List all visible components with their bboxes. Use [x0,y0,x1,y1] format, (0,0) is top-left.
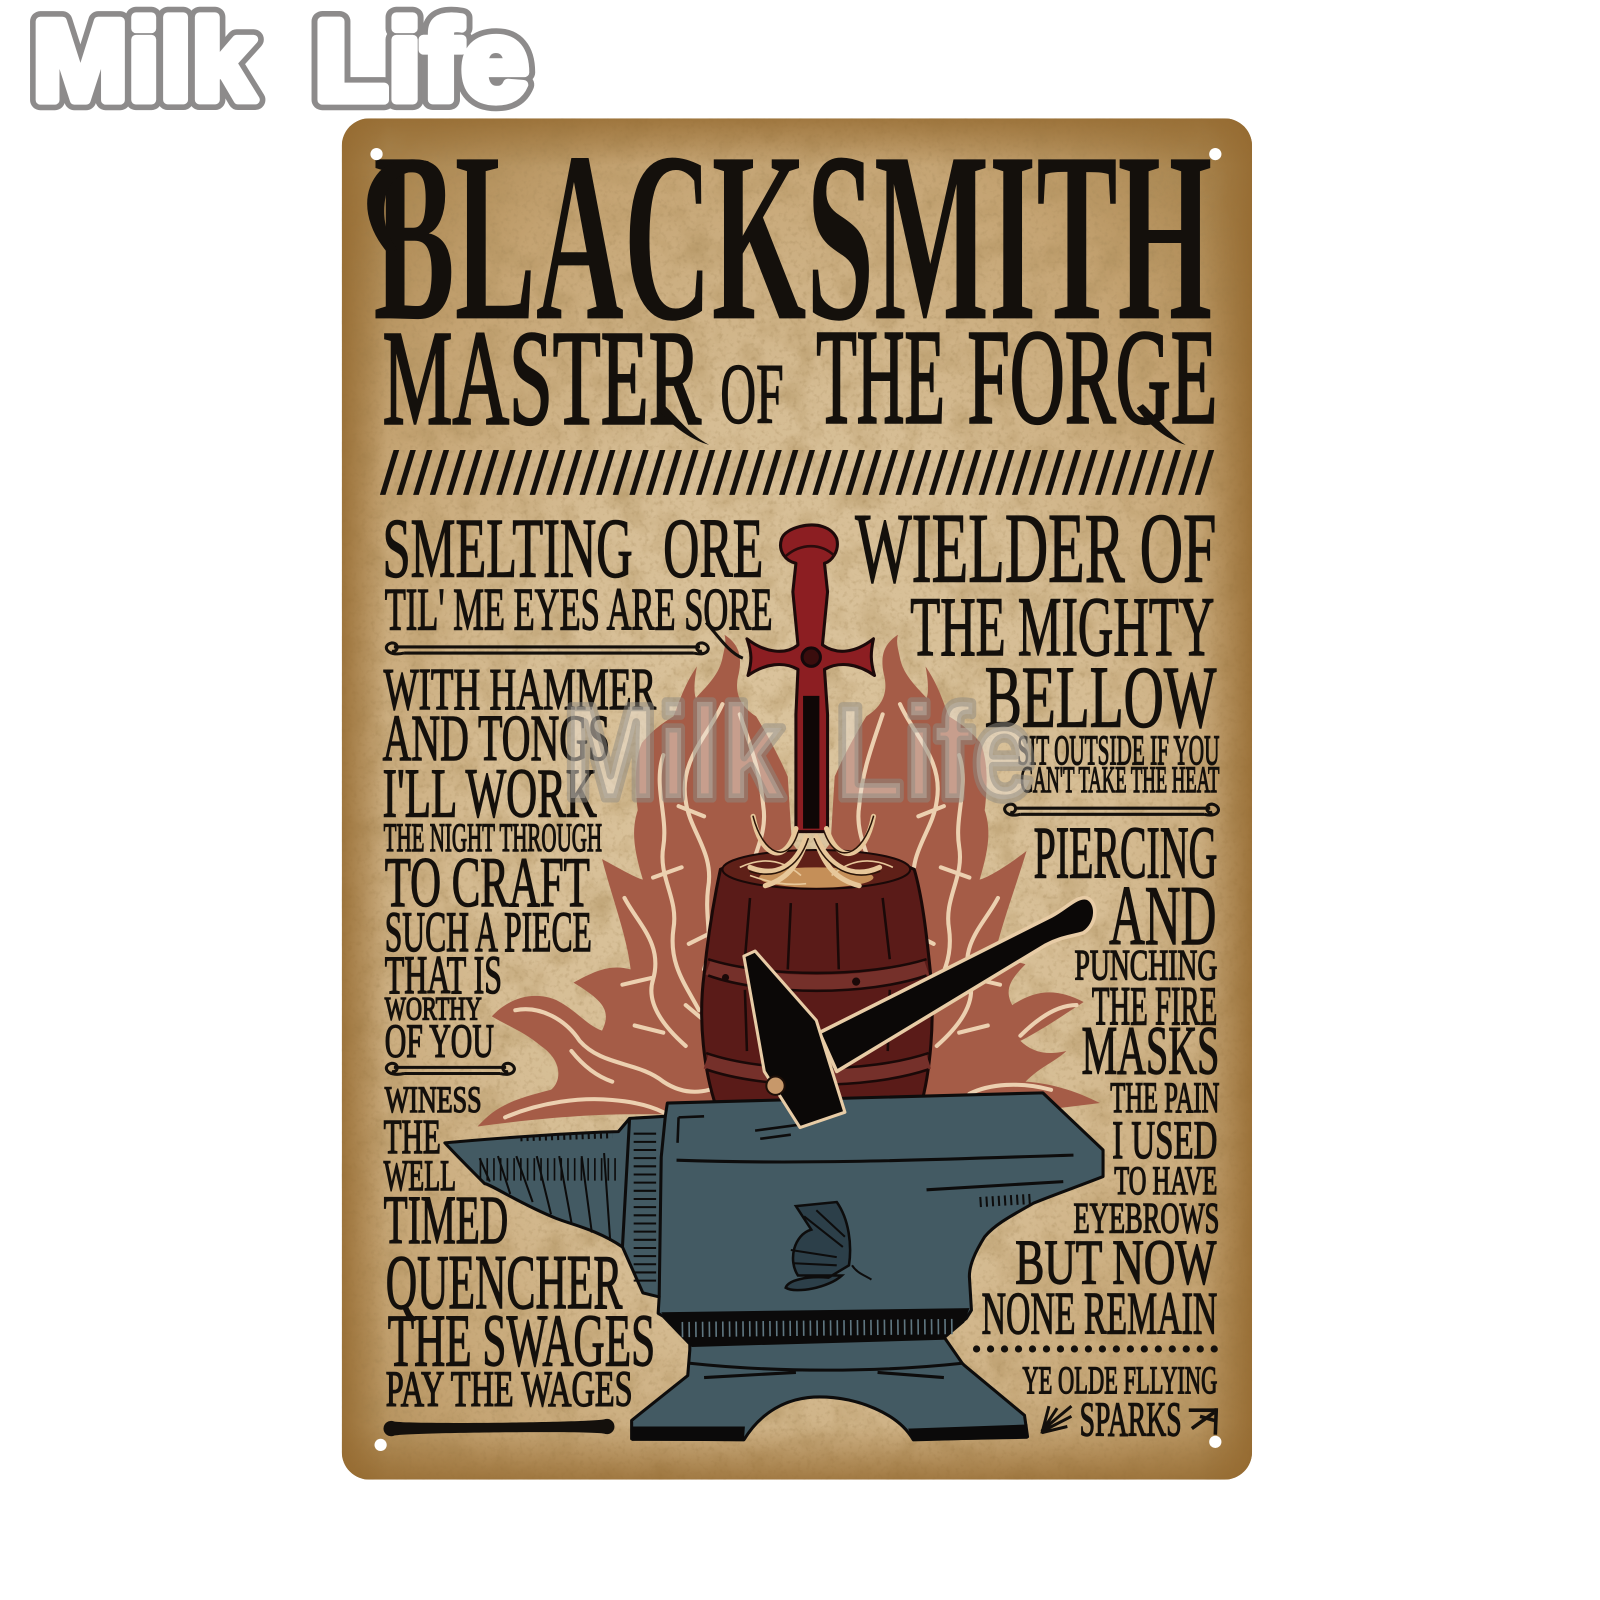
block: piercing and punching: TO HAVE [1114,1159,1217,1203]
illustration: sword in barrel [747,525,880,886]
mounting holes [370,148,1221,1451]
logo: Milk Life: Milk [33,0,256,125]
sword base splash [750,816,880,886]
logo: Milk Life [33,0,529,125]
block: witness the quencher: PAY THE WAGES [386,1362,633,1418]
block: witness the quencher: WELL [384,1153,456,1200]
block: with hammer: WITH HAMMER [384,656,656,722]
block: piercing and punching: AND [1109,870,1216,963]
block: with hammer: THAT IS [385,945,502,1005]
block: wielder of the mighty bellow: CAN'T TAKE THE HEAT [1020,759,1219,800]
block: wielder of the mighty bellow: WIELDER OF [855,493,1216,604]
block: piercing and punching: EYEBROWS [1073,1196,1219,1243]
illustration: anvil [445,1093,1103,1441]
block: with hammer: THE NIGHT THROUGH [384,816,602,860]
icon: spark arrow right [1189,1408,1216,1435]
illustration: flames [478,635,1100,1127]
block: with hammer: AND TONGS [383,703,610,775]
block: smelting ore: TIL' ME EYES ARE SORE [385,577,772,644]
illustration: barrel [702,850,932,1107]
block: wielder of the mighty bellow [855,493,1219,800]
watermark: Milk Life: Milk [563,679,784,827]
block: piercing and punching: PIERCING [1034,813,1217,895]
subtitle: MASTER OF THE FORGE: THE [816,302,945,452]
flame left [478,635,811,1127]
anvil hatching [480,1116,1031,1288]
logo: Milk Life: Life [314,0,529,125]
block: piercing and punching: MASKS [1082,1012,1219,1088]
block: wielder of the mighty bellow: BELLOW [985,649,1216,746]
block: witness the quencher: THE SWAGES [388,1300,655,1382]
subtitle: MASTER OF THE FORGE [383,302,1217,453]
block: with hammer: OF YOU [385,1015,494,1068]
parchment background [342,118,1252,1480]
block: piercing and punching: THE PAIN [1110,1075,1219,1122]
flame right [811,635,1100,1114]
block: witness the quencher [384,1079,655,1418]
logo: Milk Life: Life [314,0,529,125]
subtitle: MASTER OF THE FORGE: MASTER [383,303,701,453]
subtitle: MASTER OF THE FORGE: OF [720,346,784,441]
divider: slash band [387,450,1215,494]
block: wielder of the mighty bellow: THE MIGHTY [910,581,1214,674]
watermark: Milk Life: Life [835,679,1035,827]
right column text [855,493,1219,1447]
block: with hammer: TO CRAFT [385,843,590,922]
block: ye olde sparks [1022,1359,1217,1447]
watermark: Milk Life [563,679,1035,827]
block: piercing and punching: I USED [1112,1110,1217,1170]
ornament divider [386,1063,514,1074]
left column text [383,503,772,1436]
ornament divider [1005,804,1218,815]
block: with hammer [383,656,656,1068]
panel: metal sign [342,102,1252,1480]
block: piercing and punching: NONE REMAIN [982,1281,1217,1348]
anvil mark [786,1202,850,1290]
icon: spark arrow left [1042,1406,1071,1434]
block: piercing and punching: THE FIRE [1092,975,1217,1036]
block: ye olde sparks: SPARKS [1080,1392,1182,1447]
block: witness the quencher: QUENCHER [386,1239,623,1325]
block: with hammer: I'LL WORK [383,755,597,832]
block: with hammer: WORTHY [385,991,482,1027]
block: piercing and punching [982,813,1219,1348]
dotted divider [977,1345,1217,1352]
ornament bar [383,1419,614,1436]
heading flourish [367,159,429,253]
block: ye olde sparks: YE OLDE FLLYING [1022,1359,1217,1402]
block: smelting ore: SMELTING [383,503,633,596]
block: witness the quencher: WINESS [385,1079,482,1120]
block: wielder of the mighty bellow: SIT OUTSIDE IF YOU [1017,728,1219,774]
block: witness the quencher: TIMED [384,1182,508,1258]
ornament divider [386,643,708,654]
block: smelting ore [383,503,772,658]
subtitle: MASTER OF THE FORGE: FORGE [967,302,1217,452]
block: witness the quencher: THE [384,1109,441,1164]
block: piercing and punching: PUNCHING [1074,943,1217,990]
block: smelting ore: ORE [663,503,763,596]
logo: Milk Life: Milk [33,0,256,125]
illustration: hammer [744,898,1095,1128]
block: with hammer: SUCH A PIECE [385,901,592,964]
block: piercing and punching: BUT NOW [1015,1228,1217,1298]
